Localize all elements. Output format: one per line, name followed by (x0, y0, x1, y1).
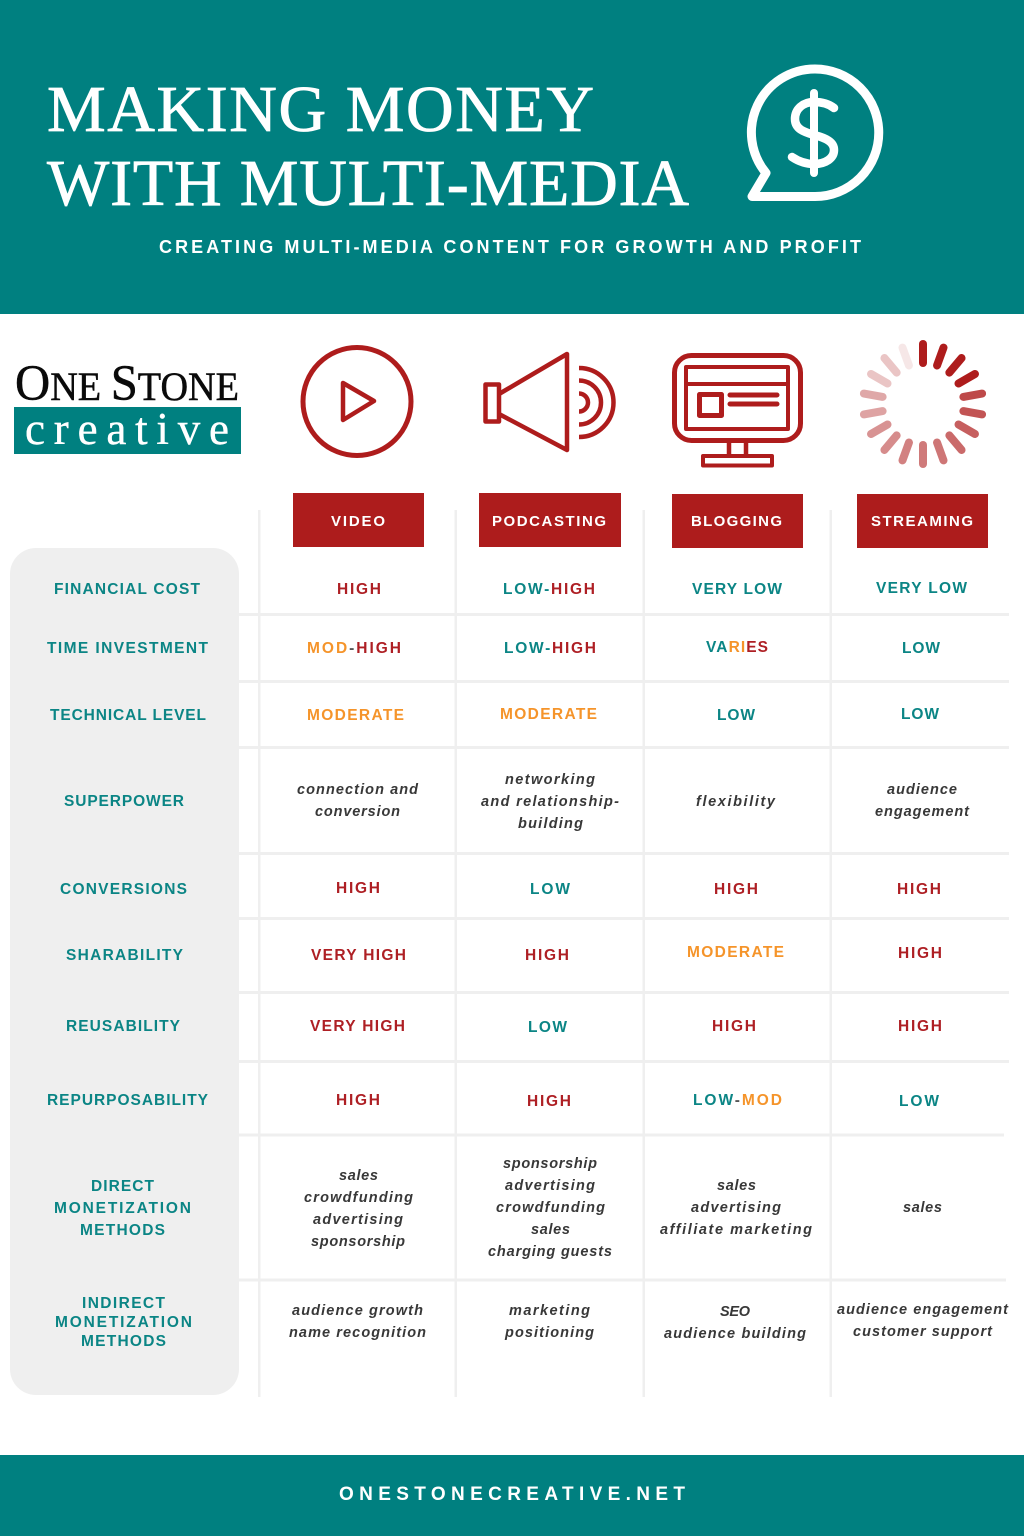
label: TIME INVESTMENT (47, 640, 209, 657)
title: MAKING MONEY (47, 73, 594, 146)
video value: advertising (313, 1212, 403, 1228)
video value: VERY HIGH (311, 947, 406, 964)
column heading: video (293, 493, 424, 547)
blogging value: LOW (717, 707, 755, 724)
video value: HIGH (337, 581, 381, 598)
podcasting value: networking (505, 772, 595, 788)
streaming value: HIGH (898, 945, 942, 962)
label: REPURPOSABILITY (47, 1092, 209, 1109)
label: MONETIZATION (55, 1314, 192, 1331)
label: CONVERSIONS (60, 881, 187, 898)
podcasting value: marketing (509, 1303, 590, 1319)
streaming value: LOW (902, 640, 940, 657)
icon: streaming loading spinner (864, 344, 982, 464)
streaming value: engagement (875, 804, 970, 820)
row label panel (10, 548, 239, 1395)
blogging value: audience building (664, 1326, 806, 1342)
podcasting value: LOW-HIGH (504, 640, 596, 657)
blogging value: sales (717, 1178, 756, 1194)
blogging value: HIGH (712, 1018, 756, 1035)
blogging value: flexibility (696, 794, 776, 810)
podcasting value: sales (531, 1222, 570, 1238)
label: FINANCIAL COST (54, 581, 201, 598)
label (55, 1295, 192, 1350)
video value (304, 1168, 413, 1250)
logo: One Stone creative (14, 356, 241, 454)
row: conversions (60, 880, 941, 898)
video value: sales (339, 1168, 378, 1184)
podcasting value: advertising (505, 1178, 595, 1194)
streaming value: audience (887, 782, 957, 798)
podcasting value: LOW (530, 881, 570, 898)
streaming value: LOW (901, 706, 939, 723)
blogging value: VERY LOW (692, 581, 782, 598)
blogging value: LOW-MOD (693, 1092, 782, 1109)
column heading: podcasting (479, 493, 621, 547)
label: METHODS (81, 1333, 166, 1350)
podcasting value: MODERATE (500, 706, 597, 723)
header banner (0, 0, 1024, 314)
row: indirect monetization methods (55, 1295, 1009, 1350)
row: repurposability (47, 1092, 939, 1110)
video value: HIGH (336, 880, 380, 897)
video value (297, 782, 419, 820)
blogging value (660, 1178, 812, 1238)
row: sharability (66, 944, 942, 964)
podcasting value: LOW (528, 1019, 567, 1036)
video value: MODERATE (307, 707, 404, 724)
blogging value (664, 1304, 806, 1342)
label (54, 1178, 191, 1239)
icon: podcasting speaker (486, 354, 614, 450)
podcasting value (488, 1156, 612, 1260)
column heading: streaming: STREAMING (871, 513, 973, 530)
video value: VERY HIGH (310, 1018, 405, 1035)
icon: speech bubble with dollar sign (751, 69, 879, 197)
streaming value (875, 782, 970, 820)
blogging value: VARIES (706, 639, 768, 656)
subtitle: CREATING MULTI-MEDIA CONTENT FOR GROWTH AND PROFIT (159, 237, 861, 257)
streaming value: HIGH (897, 881, 941, 898)
row: superpower (64, 772, 970, 832)
video value: conversion (315, 804, 400, 820)
video value: connection and (297, 782, 419, 798)
video value: audience growth (292, 1303, 423, 1319)
title: WITH MULTI-MEDIA (47, 147, 689, 220)
label: METHODS (80, 1222, 165, 1239)
row: reusability (66, 1018, 942, 1036)
blogging value: SEO (720, 1304, 751, 1320)
streaming value: audience engagement (837, 1302, 1009, 1318)
podcasting value: crowdfunding (496, 1200, 605, 1216)
blogging value: MODERATE (687, 944, 784, 961)
row: direct monetization methods (54, 1156, 942, 1260)
streaming value: customer support (853, 1324, 993, 1340)
blogging value: advertising (691, 1200, 781, 1216)
blogging value: affiliate marketing (660, 1222, 812, 1238)
podcasting value: sponsorship (503, 1156, 597, 1172)
column heading: streaming (857, 494, 988, 548)
column heading: podcasting: PODCASTING (492, 513, 606, 530)
video value (289, 1303, 426, 1341)
podcasting value (481, 772, 619, 832)
streaming value: VERY LOW (876, 580, 967, 597)
podcasting value (504, 1303, 594, 1341)
streaming value: HIGH (898, 1018, 942, 1035)
icon: blogging monitor (674, 356, 800, 466)
streaming value: sales (903, 1200, 942, 1216)
column heading: video: VIDEO (331, 513, 385, 530)
video value: HIGH (336, 1092, 380, 1109)
label: DIRECT (91, 1178, 155, 1195)
streaming value: LOW (899, 1093, 939, 1110)
video value: MOD-HIGH (307, 640, 401, 657)
icon: video play button (303, 348, 411, 456)
logo: One Stone creative: creative (25, 404, 229, 454)
row: time investment (47, 639, 940, 657)
video value: sponsorship (311, 1234, 405, 1250)
logo: One Stone creative: ONE STONE (15, 356, 239, 412)
podcasting value: and relationship- (481, 794, 619, 810)
row: technical level (50, 706, 939, 724)
column heading: blogging: BLOGGING (691, 513, 782, 530)
label: REUSABILITY (66, 1018, 181, 1035)
podcasting value: charging guests (488, 1244, 612, 1260)
blogging value: HIGH (714, 881, 758, 898)
video value: name recognition (289, 1325, 426, 1341)
podcasting value: positioning (504, 1325, 594, 1341)
podcasting value: HIGH (527, 1093, 571, 1110)
video value: crowdfunding (304, 1190, 413, 1206)
footer banner (0, 1455, 1024, 1536)
row: financial cost (54, 580, 967, 598)
podcasting value: building (518, 816, 583, 832)
column heading: blogging (672, 494, 803, 548)
label: SHARABILITY (66, 947, 184, 964)
label: TECHNICAL LEVEL (50, 707, 206, 724)
podcasting value: LOW-HIGH (503, 581, 595, 598)
footer url: ONESTONECREATIVE.NET (339, 1484, 685, 1505)
podcasting value: HIGH (525, 947, 569, 964)
label: INDIRECT (82, 1295, 166, 1312)
title (47, 73, 689, 220)
label: SUPERPOWER (64, 793, 184, 810)
streaming value (837, 1302, 1009, 1340)
label: MONETIZATION (54, 1200, 191, 1217)
